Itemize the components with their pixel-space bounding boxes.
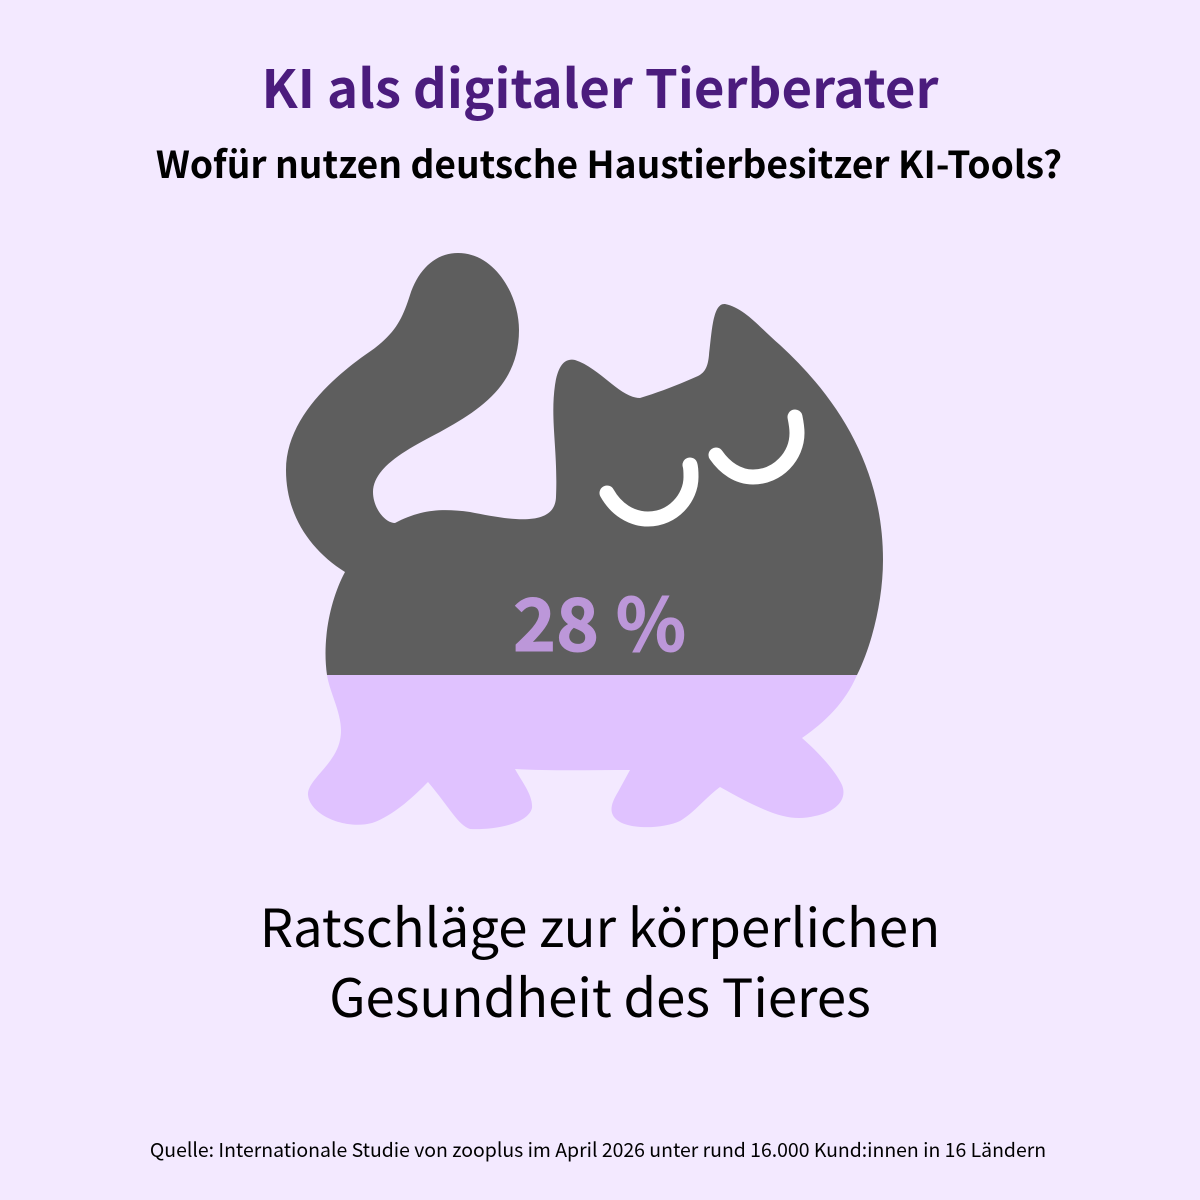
cat upper fill xyxy=(286,253,883,675)
source note: Quelle: Internationale Studie von zooplus im April 2026 unter rund 16.000 Kund:innen in 16 Ländern xyxy=(150,1134,1046,1163)
percentage value: 28 % xyxy=(513,567,686,673)
icon: right closed eye xyxy=(716,417,797,477)
icon: left closed eye xyxy=(607,465,691,519)
cat chart xyxy=(286,253,883,830)
description text: Gesundheit des Tieres xyxy=(329,957,871,1033)
cat lower fill xyxy=(308,675,857,830)
description text xyxy=(260,887,940,1033)
subtitle: Wofür nutzen deutsche Haustierbesitzer KI-Tools? xyxy=(156,135,1062,189)
description text: Ratschläge zur körperlichen xyxy=(260,887,940,963)
title: KI als digitaler Tierberater xyxy=(261,48,939,124)
